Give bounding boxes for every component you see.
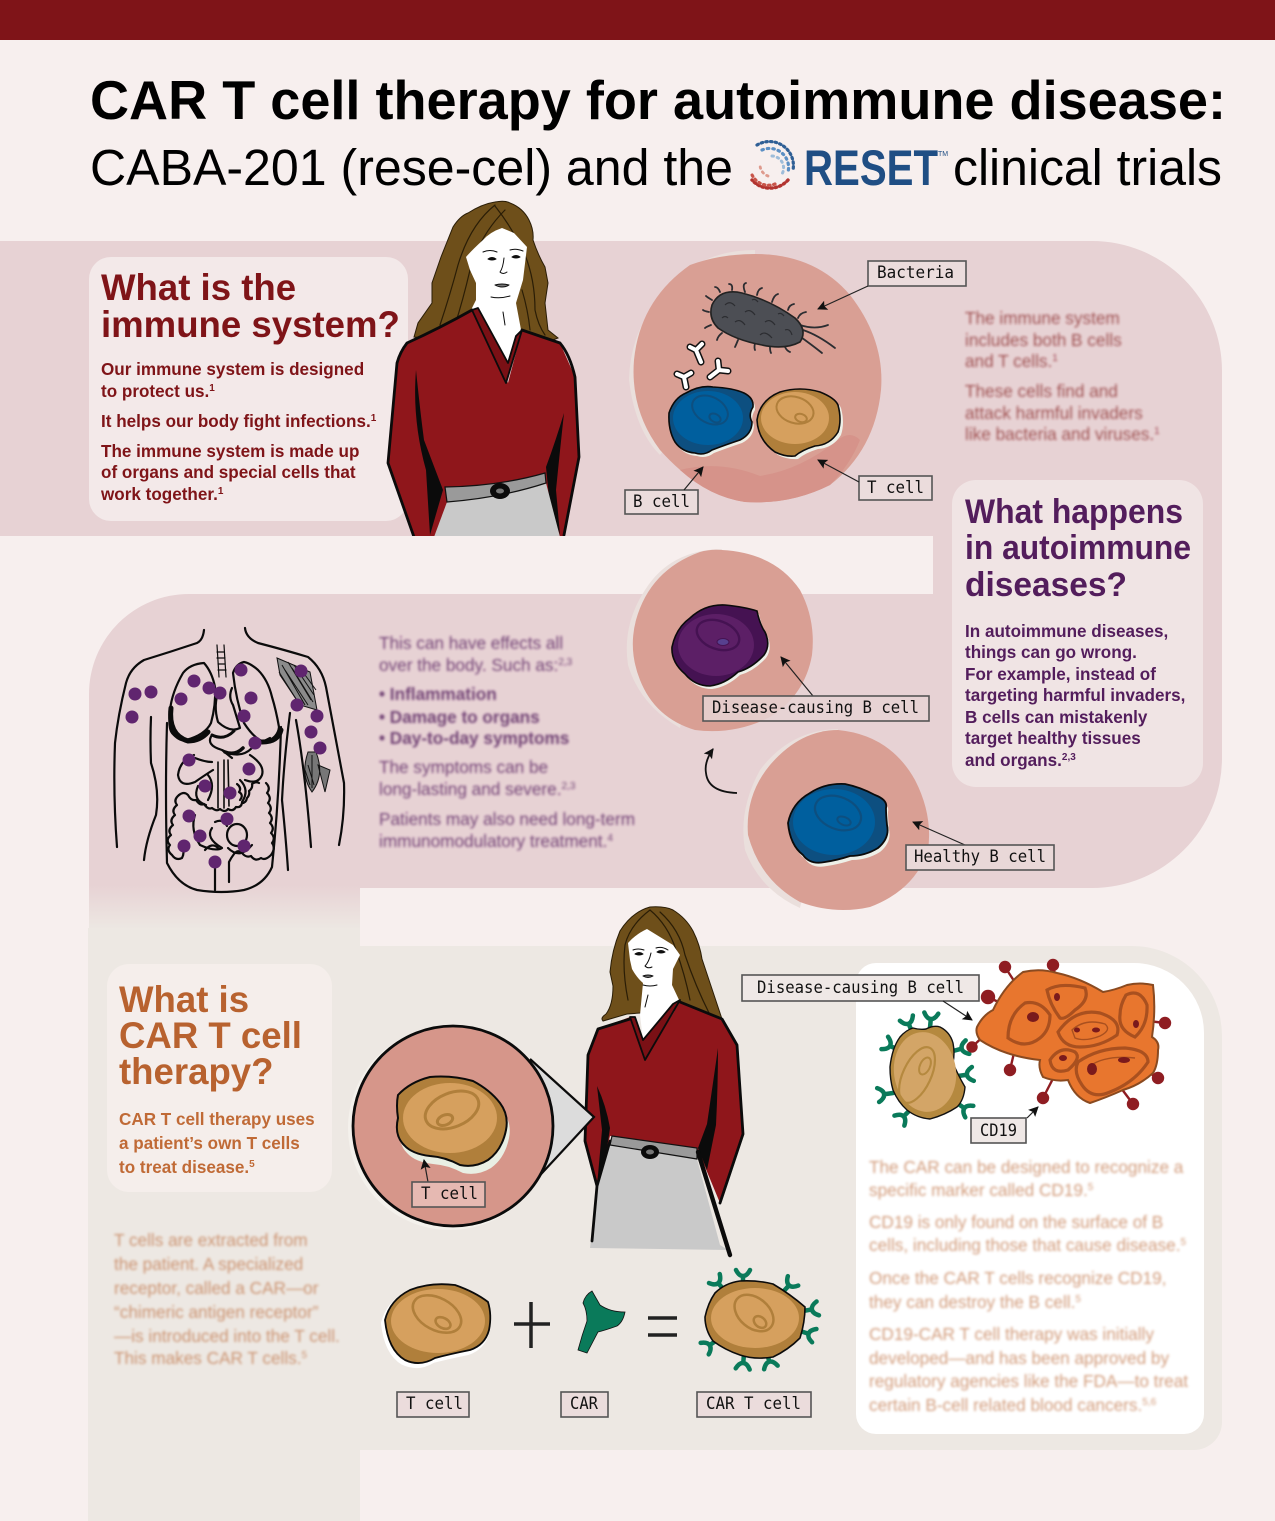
text: immune system intro: 1	[371, 413, 377, 424]
label: CD19	[971, 1118, 1026, 1143]
text: immune system intro: 1	[209, 383, 215, 394]
icon: T cell	[383, 1284, 490, 1366]
icon: CD19 markers	[968, 960, 1170, 1109]
icon: equals	[648, 1318, 677, 1335]
text: autoimmune explanation: things can go wrong.	[965, 643, 1137, 662]
text: effects on the body: Patients may also need long-term	[379, 809, 635, 829]
arrow: disease-causing B cell	[943, 1001, 972, 1020]
text: how CAR T recognizes CD19: specific marker called CD19.	[869, 1180, 1088, 1200]
illustration: disease-causing B cell circle	[627, 549, 813, 731]
text: immune system intro: work together.	[101, 485, 218, 504]
text: how CAR T recognizes CD19: CD19-CAR T cell therapy was initially	[869, 1324, 1154, 1344]
label: CAR	[561, 1392, 608, 1417]
panel: what is the immune system	[89, 257, 408, 521]
text: effects on the body: long-lasting and severe.	[379, 779, 562, 799]
icon: T cell	[757, 389, 843, 459]
text: effects on the body: This can have effects all	[379, 633, 563, 653]
title: CAR T cell therapy for autoimmune disease:	[90, 69, 1226, 131]
icon: bacteria	[703, 283, 835, 353]
text: CAR T definition: to treat disease.	[119, 1158, 249, 1177]
text: effects on the body: 4	[607, 833, 613, 844]
text: B cells and T cells: These cells find and	[965, 381, 1118, 401]
icon: antibodies	[677, 344, 728, 387]
text: autoimmune explanation: targeting harmful invaders,	[965, 686, 1185, 705]
text: how CAR T cells are made	[114, 1230, 340, 1368]
title: CABA-201 (rese-cel) and the	[90, 139, 733, 196]
text: how CAR T recognizes CD19: 5	[1088, 1182, 1094, 1193]
text: CAR T definition: 5	[249, 1159, 255, 1170]
text: effects on the body: over the body. Such as:	[379, 655, 558, 675]
text: effects on the body: • Damage to organs	[379, 707, 540, 727]
label: T cell in magnifier: T cell	[421, 1184, 478, 1204]
arrow: bacteria	[818, 286, 868, 309]
text: how CAR T cells are made: This makes CAR T cells.	[114, 1348, 302, 1368]
text: immune system intro: The immune system is made up	[101, 442, 359, 461]
label: B cell: B cell	[633, 492, 690, 512]
text: B cells and T cells	[965, 308, 1160, 444]
label: bacteria	[868, 261, 966, 286]
text: effects on the body: • Day-to-day symptoms	[379, 728, 569, 748]
text: how CAR T recognizes CD19: they can destroy the B cell.	[869, 1292, 1075, 1312]
arrow: T cell	[818, 460, 859, 482]
text: how CAR T recognizes CD19: The CAR can be designed to recognize a	[869, 1157, 1184, 1177]
panel: beige CAR T column	[88, 928, 1222, 1521]
text: how CAR T recognizes CD19: certain B-cell related blood cancers.	[869, 1395, 1142, 1415]
heading: CAR T cell therapy: therapy?	[119, 1051, 273, 1092]
text: how CAR T recognizes CD19: 5	[1180, 1237, 1186, 1248]
text: how CAR T recognizes CD19: 5,6	[1142, 1397, 1157, 1408]
arrow: T cell in magnifier	[424, 1160, 428, 1182]
arrow: healthy to disease-causing	[706, 749, 737, 793]
text: CAR T definition	[119, 1110, 315, 1177]
label: T cell: T cell	[406, 1394, 463, 1414]
text: B cells and T cells: and T cells.	[965, 351, 1052, 371]
text: effects on the body: 2,3	[558, 657, 573, 668]
text: how CAR T recognizes CD19: regulatory agencies like the FDA—to treat	[869, 1371, 1188, 1391]
text: B cells and T cells: 1	[1052, 353, 1058, 364]
text: how CAR T cells are made: 5	[302, 1350, 308, 1361]
heading: autoimmune diseases	[965, 493, 1191, 604]
heading: CAR T cell therapy	[119, 979, 302, 1092]
text: how CAR T recognizes CD19	[869, 1157, 1188, 1415]
text: immune system intro: 1	[218, 486, 224, 497]
text: effects on the body: immunomodulatory treatment.	[379, 831, 607, 851]
text: autoimmune explanation: B cells can mistakenly	[965, 708, 1148, 727]
label: CAR T cell: CAR T cell	[706, 1394, 801, 1414]
label: disease-causing B cell: Disease-causing B cell	[757, 978, 964, 998]
text: effects on the body: 2,3	[562, 781, 576, 792]
text: effects on the body	[379, 633, 635, 851]
text: immune system intro: Our immune system is designed	[101, 360, 364, 379]
label: healthy B cell: Healthy B cell	[914, 847, 1046, 867]
text: immune system intro: of organs and special cells that	[101, 463, 356, 482]
heading: immune system	[101, 267, 400, 345]
illustration: woman with CAR T therapy	[585, 907, 743, 1255]
illustration: woman with immune system	[388, 201, 579, 537]
panel: white CD19 card	[856, 963, 1204, 1434]
text: B cells and T cells: The immune system	[965, 308, 1120, 328]
text: autoimmune explanation: For example, instead of	[965, 665, 1156, 684]
panel: pink immune system and autoimmune band	[0, 241, 1222, 890]
text: how CAR T cells are made: —is introduced into the T cell.	[114, 1326, 340, 1346]
text: B cells and T cells: like bacteria and viruses.	[965, 424, 1154, 444]
label: T cell in magnifier	[412, 1182, 485, 1207]
arrow: B cell	[684, 467, 703, 490]
icon: RESET logo: RESET	[804, 140, 938, 196]
panel: fade from pink to beige	[89, 885, 360, 930]
top bar	[0, 0, 1275, 40]
icon: RESET logo: TM	[938, 151, 948, 158]
icon: magnifier with T cell	[348, 1026, 594, 1230]
text: autoimmune explanation: and organs.	[965, 751, 1062, 770]
text: autoimmune explanation: target healthy tissues	[965, 729, 1141, 748]
heading: immune system: What is the	[101, 267, 296, 308]
text: CAR T definition: a patient’s own T cells	[119, 1134, 300, 1153]
heading: CAR T cell therapy: What is	[119, 979, 249, 1020]
label: CD19: CD19	[980, 1121, 1017, 1141]
text: how CAR T recognizes CD19: cells, including those that cause disease.	[869, 1235, 1180, 1255]
heading: immune system: immune system?	[101, 304, 400, 345]
text: B cells and T cells: includes both B cells	[965, 330, 1122, 350]
text: effects on the body: • Inflammation	[379, 684, 497, 704]
label: CAR: CAR	[570, 1394, 599, 1414]
label: disease-causing B cell: Disease-causing B cell	[712, 698, 919, 718]
title: clinical trials	[953, 139, 1222, 196]
text: autoimmune explanation: 2,3	[1062, 752, 1076, 763]
icon: B cell	[669, 387, 755, 457]
title	[90, 69, 1226, 196]
text: B cells and T cells: 1	[1154, 426, 1160, 437]
icon: CAR T cell with receptors	[877, 1012, 974, 1126]
heading: autoimmune diseases: What happens	[965, 493, 1183, 531]
icon: disease-causing B cell cluster	[976, 970, 1158, 1103]
heading: autoimmune diseases: diseases?	[965, 566, 1127, 604]
icon: CAR T cell	[701, 1270, 819, 1370]
text: immune system intro	[100, 360, 377, 504]
text: autoimmune explanation	[965, 622, 1185, 770]
label: T cell	[397, 1392, 469, 1417]
heading: CAR T cell therapy: CAR T cell	[119, 1015, 302, 1056]
text: CAR T definition: CAR T cell therapy uses	[119, 1110, 315, 1129]
icon: CAR	[578, 1291, 625, 1353]
illustration: immune cells circle	[629, 250, 881, 502]
label: bacteria: Bacteria	[877, 263, 954, 283]
arrow: disease-causing B cell	[781, 657, 813, 696]
text: how CAR T recognizes CD19: Once the CAR T cells recognize CD19,	[869, 1268, 1166, 1288]
text: how CAR T cells are made: T cells are extracted from	[114, 1230, 308, 1250]
icon: plus	[514, 1302, 550, 1348]
text: how CAR T cells are made: receptor, called a CAR—or	[114, 1278, 319, 1298]
heading: autoimmune diseases: in autoimmune	[965, 529, 1191, 567]
text: effects on the body: The symptoms can be	[379, 757, 548, 777]
text: how CAR T recognizes CD19: developed—and has been approved by	[869, 1348, 1169, 1368]
panel: what is CAR T cell therapy	[107, 964, 332, 1192]
text: how CAR T cells are made: “chimeric antigen receptor”	[114, 1302, 319, 1322]
arrow: healthy B cell	[913, 822, 965, 845]
text: autoimmune explanation: In autoimmune diseases,	[965, 622, 1168, 641]
illustration: healthy B cell circle	[743, 729, 929, 910]
cells: disease-causing cells in body	[126, 664, 326, 868]
illustration: body with affected organs	[114, 628, 344, 892]
icon: RESET logo	[751, 140, 948, 196]
text: how CAR T recognizes CD19: 5	[1075, 1294, 1081, 1305]
label: T cell: T cell	[867, 478, 924, 498]
text: B cells and T cells: attack harmful invaders	[965, 403, 1143, 423]
text: how CAR T recognizes CD19: CD19 is only found on the surface of B	[869, 1212, 1163, 1232]
arrow: CD19	[1027, 1107, 1038, 1118]
panel: what happens in autoimmune diseases	[952, 480, 1203, 787]
text: how CAR T cells are made: the patient. A specialized	[114, 1254, 303, 1274]
illustration: CAR T cell attacking B cell	[877, 960, 1170, 1126]
text: immune system intro: It helps our body fight infections.	[101, 412, 371, 431]
text: immune system intro: to protect us.	[101, 382, 209, 401]
